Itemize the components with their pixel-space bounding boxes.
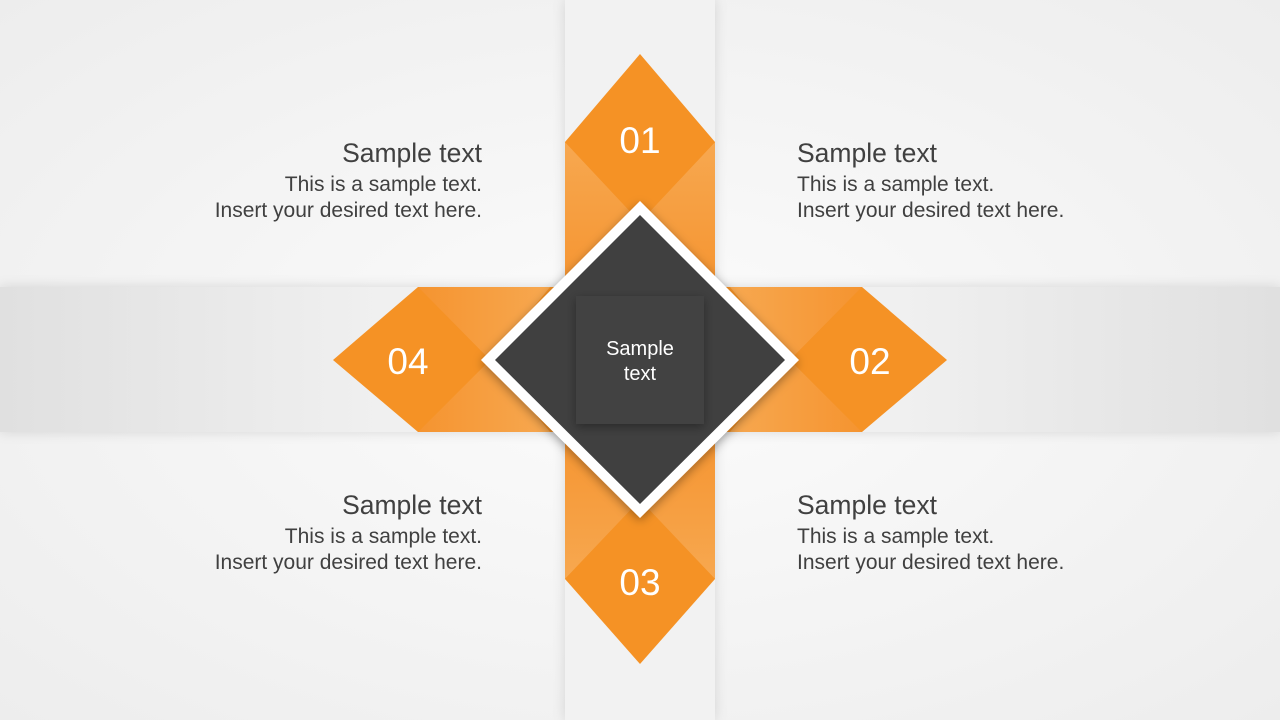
text block top-left	[215, 138, 483, 222]
diamond 04	[333, 287, 490, 432]
text block top-right: This is a sample text.	[797, 173, 994, 196]
text block top-left: Sample text	[342, 138, 483, 168]
diamond 02: 02	[849, 341, 891, 382]
diamond 02	[790, 287, 947, 432]
center square: text	[624, 363, 657, 385]
text block bottom-right	[797, 490, 1064, 574]
text block bottom-right: This is a sample text.	[797, 525, 994, 548]
horizontal orange band	[418, 287, 862, 432]
diamond 04: 04	[387, 341, 429, 382]
text block top-right	[797, 138, 1064, 222]
diamond 01	[565, 54, 715, 222]
center diamond	[481, 201, 799, 518]
text block bottom-left: Sample text	[342, 490, 483, 520]
text block bottom-left	[215, 490, 483, 574]
diamond 01: 01	[619, 120, 661, 161]
center square	[576, 296, 704, 424]
center square: Sample	[606, 338, 674, 360]
text block top-left: This is a sample text.	[285, 173, 482, 196]
text block top-right: Sample text	[797, 138, 938, 168]
text block top-left: Insert your desired text here.	[215, 199, 482, 222]
text block bottom-right: Insert your desired text here.	[797, 551, 1064, 574]
diamond 03	[565, 500, 715, 664]
vertical orange band	[565, 142, 715, 579]
text block top-right: Insert your desired text here.	[797, 199, 1064, 222]
diamond 03: 03	[619, 562, 661, 603]
vertical strip	[565, 0, 715, 720]
horizontal strip	[0, 287, 1280, 432]
text block bottom-left: This is a sample text.	[285, 525, 482, 548]
text block bottom-right: Sample text	[797, 490, 938, 520]
text block bottom-left: Insert your desired text here.	[215, 551, 482, 574]
